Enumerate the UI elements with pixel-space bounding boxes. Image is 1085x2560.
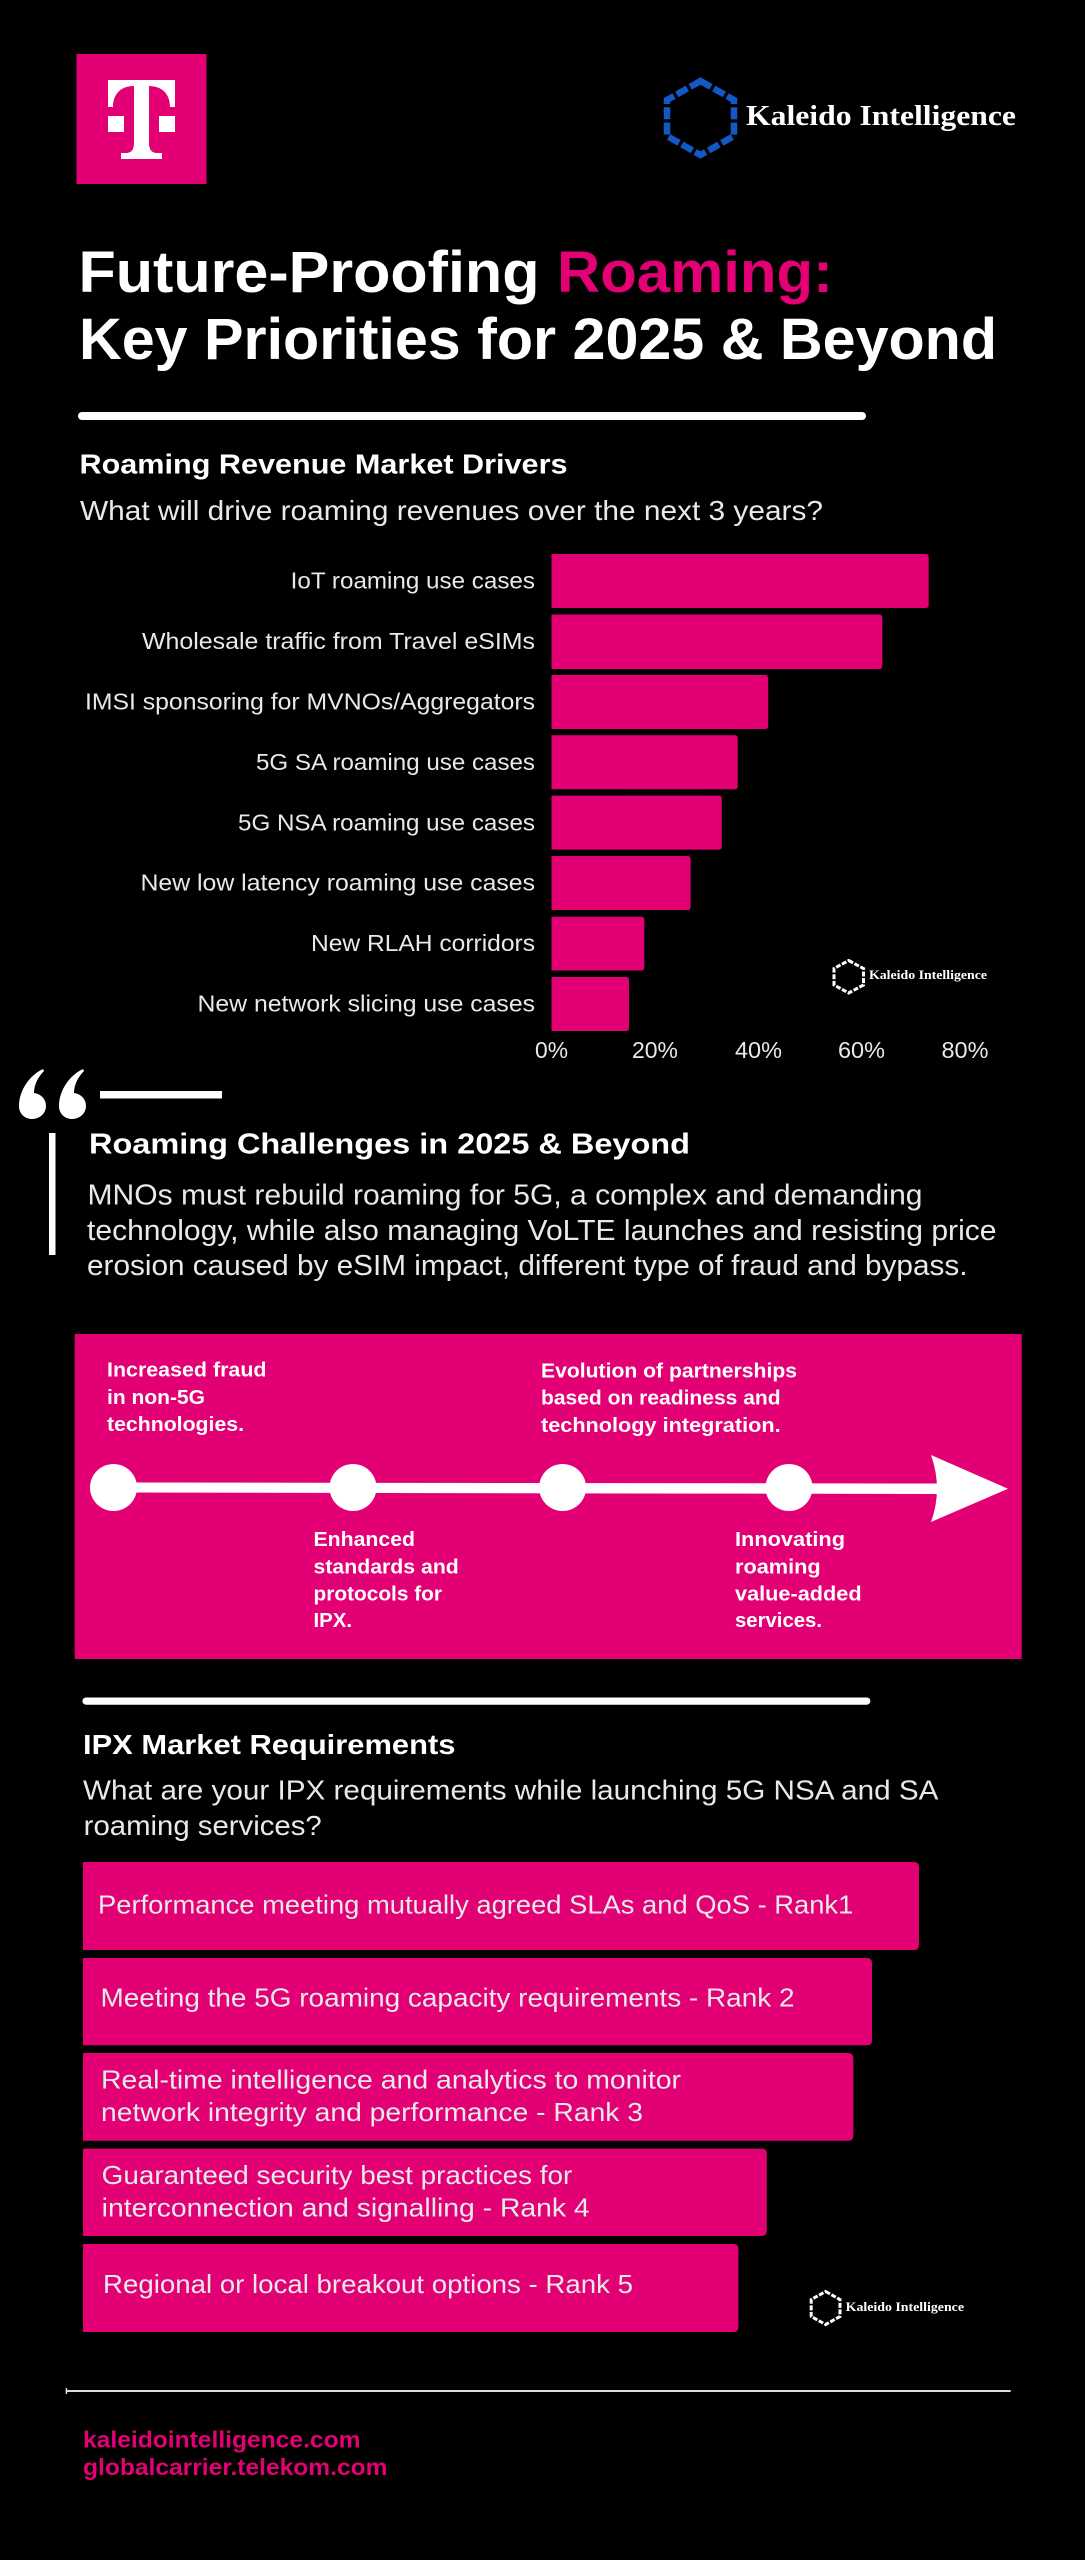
- text: evolution of partnerships: Evolution of partnerships: [541, 1360, 797, 1382]
- rank 4: interconnection and signalling - Rank 4: [102, 2192, 590, 2222]
- text: enhanced standards: Enhanced: [314, 1529, 415, 1551]
- rank 3: Real-time intelligence and analytics to monitor: [101, 2064, 681, 2094]
- bar: 5G SA roaming use cases: [256, 735, 738, 789]
- arrow: timeline line: [100, 1455, 1008, 1522]
- bar: IMSI sponsoring for MVNOs/Aggregators: IMSI sponsoring for MVNOs/Aggregators: [85, 688, 535, 714]
- heading: Roaming Challenges: Roaming Challenges in 2025 & Beyond: [89, 1128, 690, 1160]
- title: Key Priorities for 2025 & Beyond: [79, 307, 997, 372]
- footer links: kaleidointelligence.com: [83, 2427, 360, 2453]
- heading: IPX Market Requirements: IPX Market Requirements: [83, 1729, 455, 1760]
- bar: IoT roaming use cases: [291, 554, 929, 608]
- text: challenges paragraph: erosion caused by eSIM impact, different type of fraud and bypass.: [87, 1250, 968, 1282]
- bar: 5G SA roaming use cases: 5G SA roaming use cases: [256, 749, 535, 775]
- watermark: Kaleido Intelligence IPX: [811, 2292, 964, 2324]
- text: evolution of partnerships: based on readiness and: [541, 1388, 781, 1410]
- bar: Wholesale traffic from Travel eSIMs: [142, 614, 882, 669]
- rank 2: Meeting the 5G roaming capacity requirements - Rank 2: [100, 1982, 794, 2012]
- text: evolution of partnerships: technology integration.: [541, 1415, 781, 1437]
- panel: timeline: [75, 1334, 1022, 1659]
- text: evolution of partnerships: [541, 1360, 797, 1437]
- text: increased fraud: [107, 1360, 266, 1436]
- logo: Telekom T: [76, 54, 206, 184]
- axis labels: 60%: [838, 1037, 885, 1063]
- rank 4: Guaranteed security best practices for: [102, 2160, 573, 2190]
- text: challenges paragraph: [87, 1180, 997, 1282]
- rank 3: network integrity and performance - Rank 3: [101, 2097, 643, 2127]
- rank 1: [83, 1862, 919, 1950]
- rank 4: [83, 2149, 767, 2236]
- bar: Wholesale traffic from Travel eSIMs: Wholesale traffic from Travel eSIMs: [142, 628, 535, 654]
- bar: New RLAH corridors: New RLAH corridors: [311, 930, 535, 956]
- watermark: Kaleido Intelligence IPX: Kaleido Intelligence: [846, 2300, 964, 2314]
- axis labels: 40%: [735, 1037, 782, 1063]
- text: IPX question: roaming services?: [84, 1810, 322, 1841]
- text: increased fraud: Increased fraud: [107, 1360, 266, 1382]
- axis labels: [535, 1037, 989, 1063]
- text: enhanced standards: protocols for: [314, 1584, 442, 1606]
- watermark: Kaleido Intelligence chart: [834, 960, 987, 993]
- text: increased fraud: technologies.: [107, 1414, 244, 1436]
- rank 3: [83, 2053, 853, 2141]
- text: chart question: What will drive roaming revenues over the next 3 years?: [80, 495, 823, 526]
- ranked bars: IPX requirements: [83, 1862, 919, 2332]
- text: enhanced standards: IPX.: [314, 1610, 352, 1632]
- axis labels: 80%: [942, 1037, 989, 1063]
- bar: New low latency roaming use cases: [140, 856, 691, 910]
- text: innovating services: Innovating: [735, 1529, 845, 1551]
- bar: New network slicing use cases: New network slicing use cases: [198, 990, 535, 1016]
- bar: New low latency roaming use cases: New low latency roaming use cases: [140, 870, 535, 896]
- text: innovating services: value-added: [735, 1584, 862, 1606]
- rank 1: Performance meeting mutually agreed SLAs and QoS - Rank1: [98, 1890, 853, 1920]
- heading: Roaming Revenue Market Drivers: Roaming Revenue Market Drivers: [80, 448, 568, 480]
- timeline nodes: [90, 1464, 812, 1511]
- axis labels: 0%: [535, 1037, 568, 1063]
- bar: 5G NSA roaming use cases: [238, 796, 722, 850]
- title: Future-Proofing: [78, 240, 540, 305]
- rank 2: [83, 1958, 872, 2045]
- title: Roaming:: [557, 240, 833, 305]
- axis labels: 20%: [632, 1037, 678, 1063]
- text: challenges paragraph: technology, while also managing VoLTE launches and resisting price: [87, 1215, 997, 1247]
- text: increased fraud: in non-5G: [107, 1387, 205, 1409]
- bar: IMSI sponsoring for MVNOs/Aggregators: [85, 675, 768, 729]
- text: innovating services: roaming: [735, 1556, 821, 1578]
- icon: quotation mark: [19, 1069, 222, 1119]
- bar chart: roaming revenue drivers: [85, 554, 989, 1063]
- title: [78, 240, 997, 372]
- text: innovating services: [735, 1529, 862, 1632]
- logo: Kaleido Intelligence: Kaleido Intelligence: [746, 101, 1016, 132]
- text: IPX question: What are your IPX requirements while launching 5G NSA and SA: [83, 1774, 939, 1806]
- footer links: [83, 2427, 388, 2480]
- text: IPX question: [83, 1774, 939, 1841]
- bar: New RLAH corridors: [311, 917, 644, 970]
- logo: Kaleido Intelligence: [667, 81, 1016, 155]
- text: innovating services: services.: [735, 1610, 822, 1632]
- bar: 5G NSA roaming use cases: 5G NSA roaming use cases: [238, 810, 535, 836]
- rank 5: [83, 2244, 738, 2332]
- rank 5: Regional or local breakout options - Rank 5: [103, 2269, 633, 2299]
- text: challenges paragraph: MNOs must rebuild roaming for 5G, a complex and demanding: [88, 1180, 922, 1212]
- text: enhanced standards: [314, 1529, 459, 1632]
- text: enhanced standards: standards and: [314, 1556, 459, 1578]
- watermark: Kaleido Intelligence chart: Kaleido Intelligence: [869, 968, 987, 982]
- footer links: globalcarrier.telekom.com: [83, 2454, 388, 2480]
- bar: IoT roaming use cases: IoT roaming use cases: [291, 568, 535, 594]
- bar: New network slicing use cases: [198, 977, 629, 1031]
